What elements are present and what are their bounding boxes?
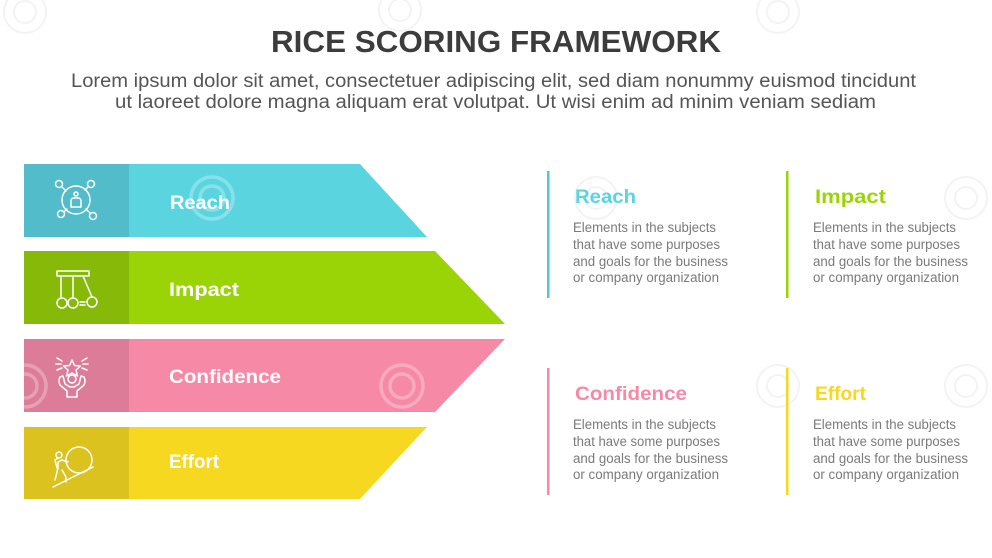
panel: Reach description	[547, 171, 728, 298]
heading: Reach: Reach	[575, 187, 636, 208]
bar: Reach	[24, 164, 427, 237]
body text: that have some purposes	[813, 237, 960, 252]
panel: Confidence description	[547, 368, 728, 495]
body text	[813, 220, 968, 285]
label: Reach: Reach	[170, 193, 230, 214]
body text: that have some purposes	[813, 434, 960, 449]
icon: newton cradle	[57, 271, 97, 308]
subtitle text: ut laoreet dolore magna aliquam erat volutpat. Ut wisi enim ad minim veniam sediam	[115, 92, 876, 113]
body text: Elements in the subjects	[813, 220, 956, 235]
subtitle text: Lorem ipsum dolor sit amet, consectetuer adipiscing elit, sed diam nonummy euismod tincidunt	[71, 71, 917, 92]
bar: Confidence	[4, 339, 505, 412]
body text	[573, 220, 728, 285]
subtitle text	[71, 71, 917, 113]
body text: and goals for the business	[573, 254, 728, 269]
heading: Confidence: Confidence	[575, 384, 687, 405]
body text: Elements in the subjects	[813, 417, 956, 432]
body text: Elements in the subjects	[573, 417, 716, 432]
heading: Effort: Effort	[815, 384, 867, 405]
watermark spirals	[4, 365, 423, 407]
body text	[813, 417, 968, 482]
icon: network person	[56, 180, 96, 220]
body text: or company organization	[573, 270, 719, 285]
watermark spiral	[191, 177, 233, 219]
icon: pushing boulder uphill	[53, 447, 93, 487]
title: RICE SCORING FRAMEWORK	[271, 24, 722, 59]
body text: or company organization	[573, 467, 719, 482]
icon: hands holding star	[56, 358, 88, 397]
body text: and goals for the business	[813, 254, 968, 269]
label: Impact: Impact	[169, 280, 240, 301]
body text	[573, 417, 728, 482]
panel: Effort description	[786, 368, 968, 495]
bar: Impact	[24, 251, 505, 324]
body text: and goals for the business	[573, 451, 728, 466]
panel: Impact description	[786, 171, 968, 298]
bar: Effort	[24, 427, 427, 499]
heading: Impact: Impact	[815, 187, 887, 208]
body text: or company organization	[813, 467, 959, 482]
body text: that have some purposes	[573, 237, 720, 252]
body text: that have some purposes	[573, 434, 720, 449]
label: Effort: Effort	[169, 452, 220, 473]
background watermark spirals	[4, 0, 987, 407]
label: Confidence: Confidence	[169, 367, 281, 388]
body text: and goals for the business	[813, 451, 968, 466]
body text: or company organization	[813, 270, 959, 285]
body text: Elements in the subjects	[573, 220, 716, 235]
